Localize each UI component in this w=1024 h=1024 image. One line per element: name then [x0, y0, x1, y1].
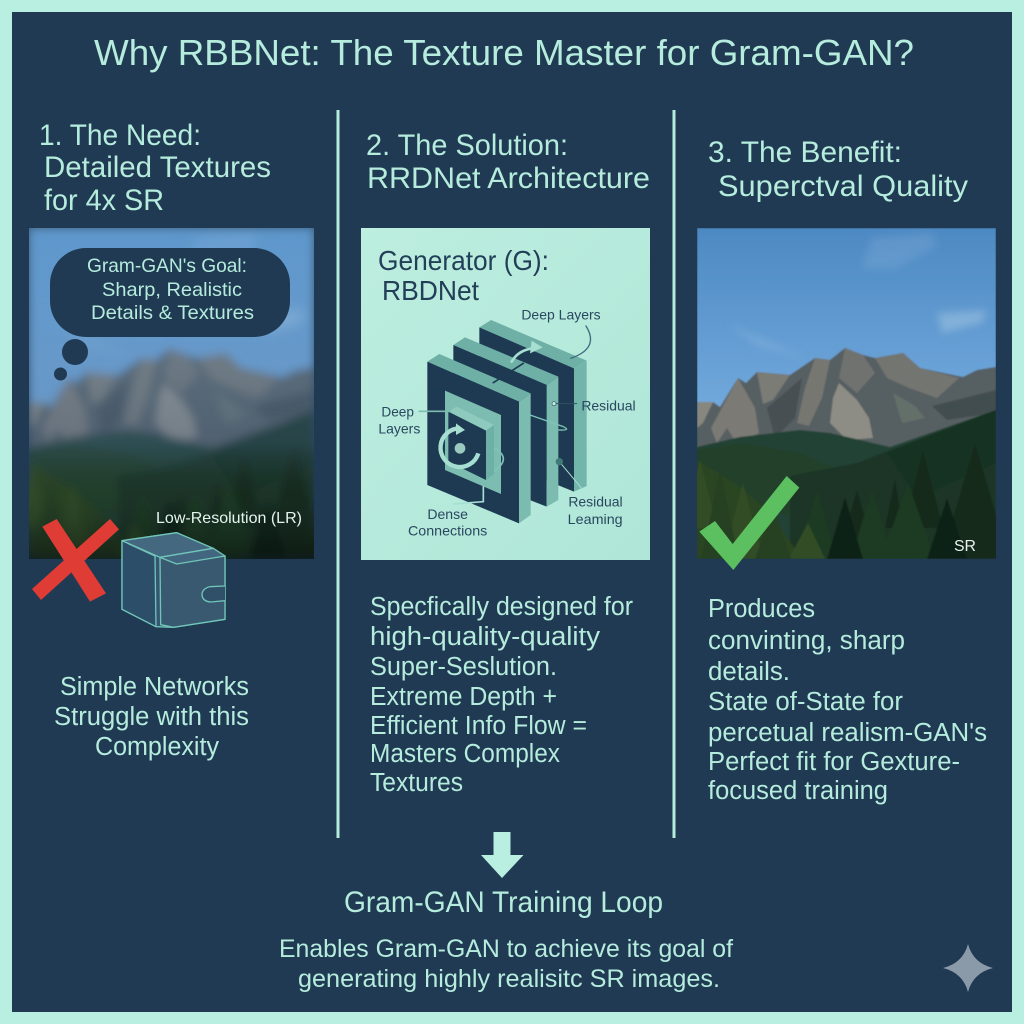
- body text: solution: [370, 593, 633, 797]
- footer text: Enables Gram-GAN to achieve its goal of: [279, 935, 733, 963]
- connectors: [419, 326, 591, 504]
- diagram labels: Residual: [568, 494, 623, 510]
- loop icon: [441, 423, 478, 467]
- blurred low-resolution image: [16, 228, 326, 559]
- panel: the need: [16, 119, 326, 761]
- body text: benefit: State of-State for: [708, 688, 904, 716]
- footer text: generating highly realisitc SR images.: [298, 965, 720, 993]
- body text: solution: high-quality-quality: [370, 623, 600, 651]
- body text: solution: Super-Seslution.: [370, 653, 557, 681]
- icon: simple network box: [122, 533, 225, 627]
- body text: benefit: Produces: [708, 595, 815, 623]
- image label: low resolution: Low-Resolution (LR): [156, 510, 302, 527]
- sharp super-resolution image: [683, 228, 1009, 559]
- thought bubble: Sharp, Realistic: [102, 279, 242, 301]
- panel: the solution: [361, 129, 650, 797]
- heading: the need: Detailed Textures: [44, 151, 271, 184]
- architecture card: [361, 228, 650, 560]
- footer heading: Gram-GAN Training Loop: [344, 886, 663, 919]
- card title: generator: Generator (G):: [378, 245, 549, 276]
- body text: benefit: percetual realism-GAN's: [708, 719, 987, 747]
- thought bubble: Gram-GAN's Goal:: [87, 255, 247, 277]
- arrow: down to training loop: [481, 832, 524, 878]
- body text: need: Simple Networks: [60, 673, 249, 701]
- body text: benefit: convinting, sharp: [708, 627, 905, 655]
- body text: solution: Efficient Info Flow =: [370, 712, 587, 740]
- diagram: stacked layers: [378, 306, 636, 539]
- heading: the benefit: 3. The Benefit:: [708, 136, 902, 169]
- diagram labels: Deep: [381, 403, 414, 419]
- body text: benefit: focused training: [708, 777, 888, 805]
- diagram labels: Dense: [427, 506, 468, 522]
- icon: sparkle: [943, 944, 993, 992]
- body text: solution: Extreme Depth +: [370, 683, 557, 711]
- image label: SR: SR: [954, 538, 976, 555]
- body text: benefit: Perfect fit for Gexture-: [708, 748, 960, 776]
- heading: the benefit: Superctval Quality: [718, 170, 968, 203]
- diagram labels: Layers: [378, 420, 420, 436]
- body text: benefit: details.: [708, 658, 790, 686]
- heading: the need: for 4x SR: [44, 184, 164, 217]
- diagram labels: Residual: [581, 398, 636, 414]
- diagram labels: Deep Layers: [521, 306, 601, 322]
- back layer: [479, 320, 587, 492]
- heading: the solution: [366, 129, 650, 195]
- body text: need: Complexity: [95, 733, 219, 761]
- middle layer: [453, 337, 558, 507]
- diagram labels: [378, 306, 636, 539]
- heading: the need: [39, 119, 271, 217]
- heading: the solution: 2. The Solution:: [366, 129, 568, 162]
- card title: generator: [378, 245, 549, 306]
- icon: red cross: [32, 519, 119, 602]
- panel: the benefit: [683, 136, 1009, 805]
- footer text: [279, 935, 733, 993]
- body text: solution: Masters Complex: [370, 740, 560, 768]
- title: Why RBBNet: The Texture Master for Gram-GAN?: [94, 32, 914, 73]
- thought bubble: [50, 248, 290, 380]
- icon: green check: [699, 476, 799, 570]
- body text: solution: Textures: [370, 769, 463, 797]
- diagram labels: Connections: [408, 523, 487, 539]
- inner block: [445, 391, 501, 494]
- body text: need: Struggle with this: [54, 703, 249, 731]
- body text: benefit: [708, 595, 987, 805]
- heading: the need: 1. The Need:: [39, 119, 201, 152]
- heading: the benefit: [708, 136, 968, 203]
- card title: generator: RBDNet: [382, 275, 479, 306]
- diagram labels: Leaming: [568, 511, 623, 527]
- divider right: [672, 110, 676, 838]
- front layer: [427, 354, 531, 523]
- body text: solution: Specfically designed for: [370, 593, 633, 621]
- thought bubble: Details & Textures: [91, 302, 254, 324]
- heading: the solution: RRDNet Architecture: [367, 162, 650, 195]
- body text: need: [54, 673, 249, 761]
- divider left: [336, 110, 340, 838]
